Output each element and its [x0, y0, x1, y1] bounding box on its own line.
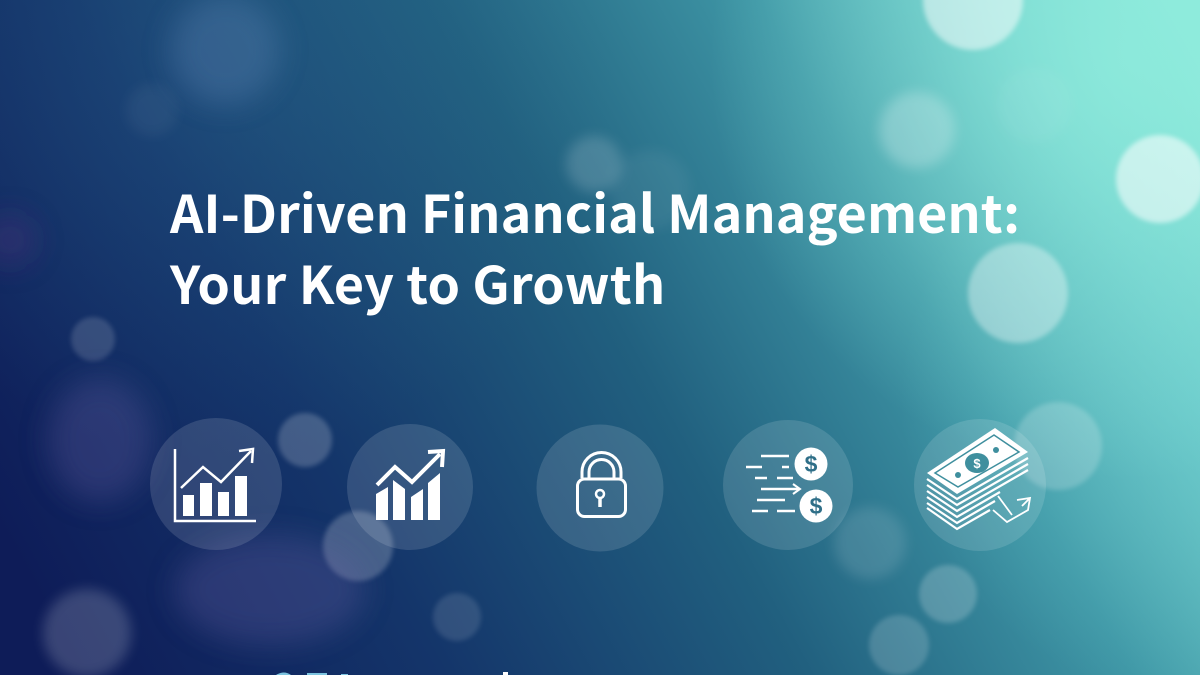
icon: stack of banknotes: [914, 419, 1046, 551]
icon: solid growth bars: [347, 424, 473, 550]
title: [169, 173, 1020, 319]
title: AI-Driven Financial Management:: [169, 173, 1020, 248]
icon: stack of banknotes: $: [973, 456, 981, 471]
icon: moving dollar coins: $: [810, 493, 823, 519]
icon: growth chart with axes: [150, 418, 282, 550]
icon: moving dollar coins: $: [805, 451, 818, 477]
icon: padlock: [536, 424, 664, 552]
clipped text at bottom edge: [276, 672, 508, 675]
title: Your Key to Growth: [169, 244, 666, 319]
icon: moving dollar coins: [723, 420, 853, 550]
